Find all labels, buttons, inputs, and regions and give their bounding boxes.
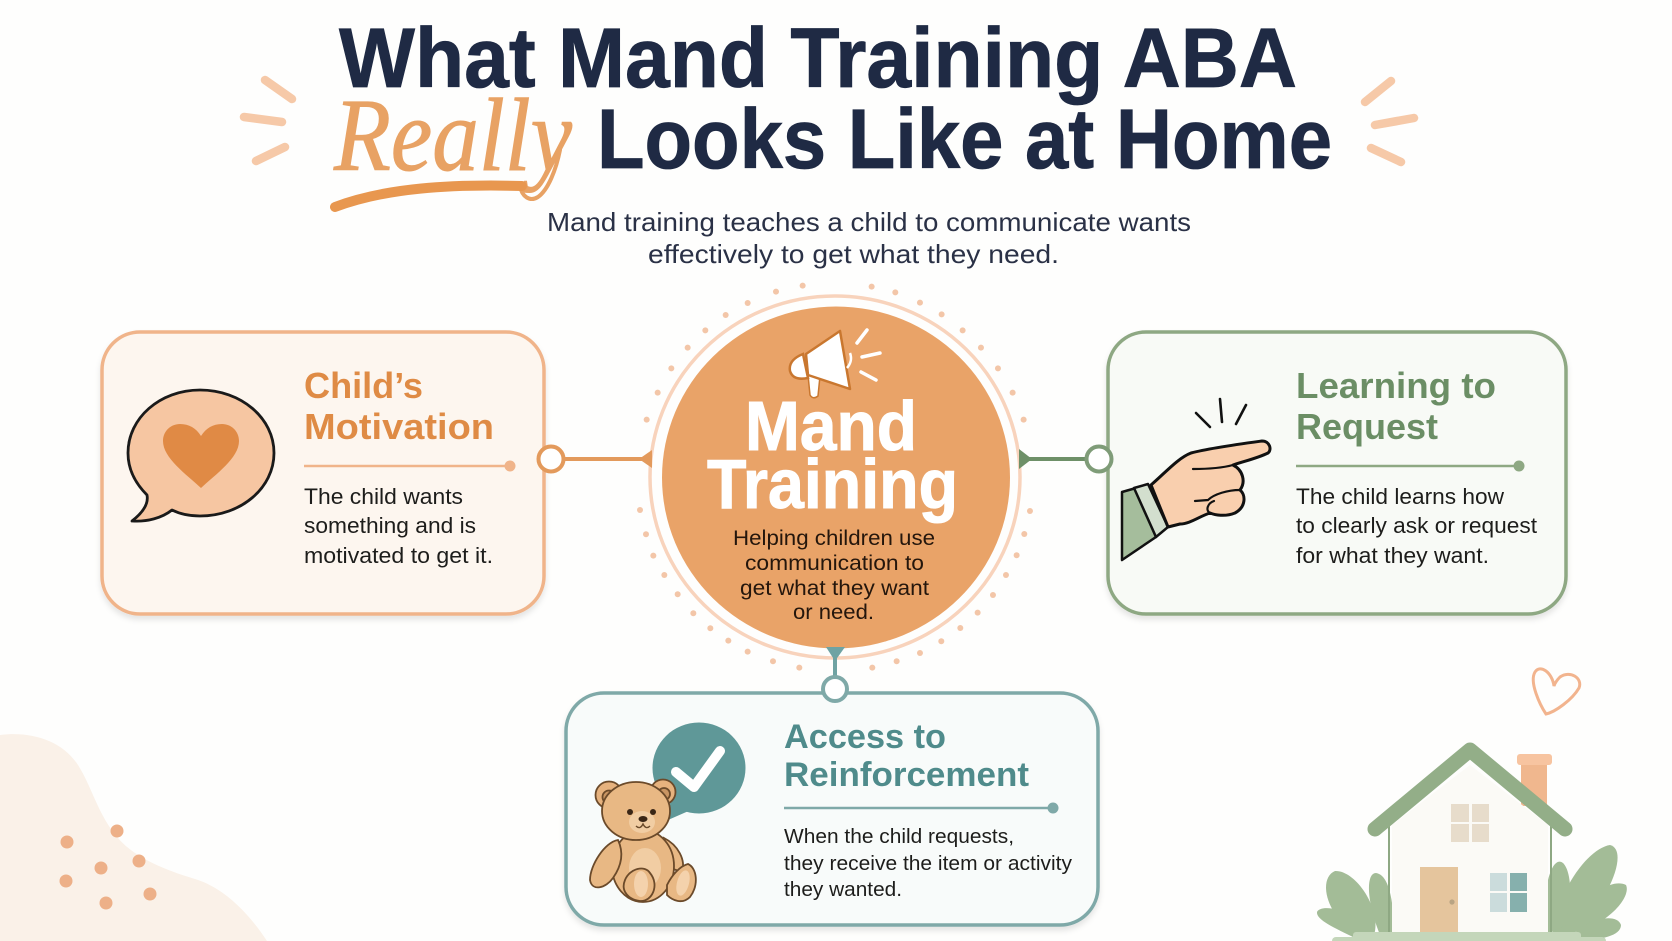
center description: or need. (793, 600, 874, 624)
title: Looks Like at Home (597, 92, 1332, 186)
walls (1392, 765, 1548, 935)
subtitle: effectively to get what they need. (648, 239, 1059, 269)
heading: Child’s (304, 365, 423, 406)
center circle: Mand Training (637, 283, 1033, 671)
title accent word: Really (333, 78, 573, 193)
description: The child learns how (1296, 484, 1504, 509)
heading: Learning to (1296, 365, 1496, 406)
connector: bottom (823, 647, 847, 701)
center description: Helping children use (733, 526, 935, 550)
icon: check speech bubble (652, 722, 746, 820)
icon: outline heart (1533, 669, 1580, 714)
center heading: Mand (745, 387, 917, 465)
center description: get what they want (740, 576, 929, 600)
upper window (1451, 804, 1489, 842)
description: for what they want. (1296, 543, 1489, 568)
connector: left (538, 446, 652, 472)
description: When the child requests, (784, 825, 1014, 848)
heading (304, 365, 494, 447)
description: motivated to get it. (304, 543, 493, 568)
icon: megaphone (790, 330, 880, 398)
heading: Access to (784, 718, 946, 756)
description (304, 484, 493, 568)
subtitle (547, 207, 1191, 269)
icon: teddy bear (590, 780, 696, 902)
center description: communication to (745, 551, 924, 575)
ground (1332, 932, 1606, 941)
left sunburst accent (244, 80, 292, 161)
title: What Mand Training ABA (339, 11, 1297, 105)
door (1420, 867, 1458, 935)
description (784, 825, 1073, 901)
heading (784, 718, 1029, 794)
lower window (1490, 873, 1527, 912)
heading: Motivation (304, 406, 494, 447)
icon: pointing hand (1122, 399, 1270, 560)
right sunburst accent (1365, 81, 1414, 162)
center heading (707, 387, 958, 523)
description (1296, 484, 1537, 568)
roof (1375, 750, 1565, 829)
description: The child wants (304, 484, 463, 509)
panel: Access to Reinforcement (566, 693, 1098, 925)
description: to clearly ask or request (1296, 513, 1537, 538)
dotted halo (637, 283, 1033, 671)
subtitle: Mand training teaches a child to communicate wants (547, 207, 1191, 237)
description: something and is (304, 513, 476, 538)
plants (1317, 845, 1627, 940)
heading (1296, 365, 1496, 447)
description: they receive the item or activity (784, 852, 1073, 875)
title (333, 11, 1332, 207)
decorative blob with dots (0, 734, 267, 941)
illustration: house with plants (1317, 750, 1627, 941)
chimney (1517, 754, 1552, 806)
panel: Child's Motivation (102, 332, 544, 614)
center heading: Training (707, 445, 958, 523)
description: they wanted. (784, 878, 902, 901)
icon: speech bubble with heart (128, 390, 274, 521)
heading: Request (1296, 406, 1438, 447)
panel: Learning to Request (1108, 332, 1566, 614)
center description (733, 526, 935, 624)
heading: Reinforcement (784, 756, 1029, 794)
connector: right (1019, 446, 1112, 472)
